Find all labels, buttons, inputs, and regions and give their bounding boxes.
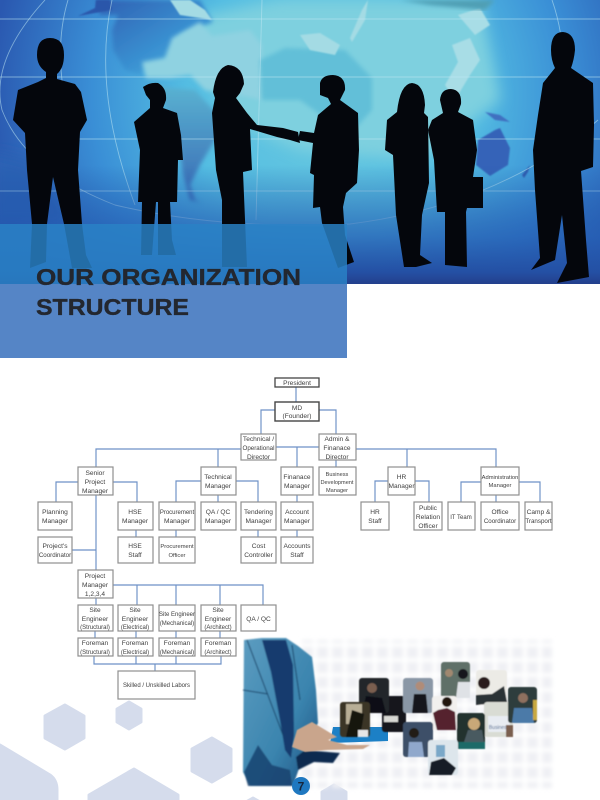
page number badge: 7 [298,780,305,794]
box: Technical Manager: Manager [205,483,232,490]
world map continents [0,0,530,224]
box: Finance Manager: Finanace [283,474,311,481]
photo tile [403,722,433,757]
box: Procurement Officer [159,537,195,563]
box: Public Relation Officer: Relation [416,514,440,521]
businessman [243,638,340,786]
box: Site Engineer Structural: Site [89,607,101,614]
box: Site Engineer Architect: (Architect) [204,625,232,631]
page number badge [292,777,310,795]
box: Senior Project Manager: Senior [85,470,105,477]
box: Technical Manager [201,467,236,495]
box: Admin & Finance Director: Admin & [325,436,350,443]
box: Foreman Structural: (Structural) [80,650,110,656]
box: Project Manager 1,2,3,4: Project [85,573,105,580]
box: QA / QC [241,605,276,631]
box: Skilled / Unskilled Labors [118,671,195,699]
photo tile: Business [489,725,510,731]
box: HSE Manager: HSE [128,509,142,516]
box: Planning Manager [38,502,72,530]
box: HSE Staff: HSE [128,543,142,550]
box: Camp & Transport: Transport [525,518,552,525]
box: HR Staff [361,502,389,530]
box: Site Engineer Architect: Site [212,607,224,614]
box: Technical / Operational Director [241,434,276,461]
box: MD: MD [292,405,302,412]
box: Office Coordinator [481,502,519,530]
box: Site Engineer Mechanical: Site Engineer [159,612,195,618]
box: Admin & Finance Director: Finanace [323,445,351,452]
box: Procurement Manager: Manager [164,518,191,525]
photo tile [476,670,507,705]
box: Senior Project Manager: Manager [82,488,109,495]
box: HSE Staff [118,537,153,563]
box: Foreman Architect [201,638,236,656]
box: Site Engineer Architect [201,605,236,631]
box: Public Relation Officer: Public [419,505,438,512]
box: Procurement Officer: Officer [169,553,186,559]
box: Office Coordinator: Office [491,509,509,516]
box: HR Manager: HR [397,474,406,481]
box: Site Engineer Electrical: Engineer [122,616,149,623]
box: Site Engineer Electrical: (Electrical) [121,625,149,631]
box: Project's Coordinator [38,537,72,563]
silhouettes of business people [13,32,594,283]
box: Technical / Operational Director: Operational [242,445,274,452]
pale grid backdrop [300,640,552,788]
box: Foreman Mechanical: (Mechanical) [160,650,194,656]
photo tile [403,678,433,713]
box: Foreman Architect: Foreman [205,640,232,647]
photo tile [441,662,470,698]
box: Site Engineer Electrical: Site [129,607,141,614]
box: Foreman Structural [78,638,113,656]
box: IT Team [448,502,475,530]
box: HSE Manager: Manager [122,518,149,525]
box: Project Manager 1,2,3,4: Manager [82,582,109,589]
box: Finance Manager: Manager [284,483,311,490]
box: Project's Coordinator: Coordinator [39,552,71,559]
box: Account Manager [281,502,313,530]
box: President [275,378,319,387]
box: Foreman Mechanical [159,638,195,656]
box: Accounts Staff [281,537,313,563]
photo tile [428,740,458,775]
box: Tendering Manager [241,502,276,530]
box: Project Manager 1,2,3,4 [78,570,113,598]
box: Administration Manager: Manager [489,483,512,489]
globe grid lines [0,0,600,225]
box: Senior Project Manager: Project [85,479,105,486]
box: Business Development Manager: Development [321,480,354,486]
box: Tendering Manager: Manager [245,518,272,525]
box: Account Manager: Manager [284,518,311,525]
box: IT Team: IT Team [450,515,472,521]
photo tile [359,678,389,713]
box: HR Staff: Staff [368,518,382,525]
title panel [0,224,347,358]
box: Admin & Finance Director [319,434,356,461]
box: QA / QC: QA / QC [246,616,271,623]
box: Foreman Mechanical: Foreman [164,640,191,647]
connector lines [56,387,540,671]
box: Planning Manager: Planning [42,509,68,516]
photo tile [340,702,370,737]
box: Procurement Manager [159,502,195,530]
box: Site Engineer Mechanical: (Mechanical) [160,621,194,627]
box: MD: (Founder) [283,413,311,420]
box: Senior Project Manager [78,467,113,495]
box: Admin & Finance Director: Director [325,454,349,461]
box: Business Development Manager: Business [326,472,349,478]
box: Camp & Transport [525,502,552,530]
box: Foreman Electrical: Foreman [122,640,149,647]
organization chart [38,378,552,699]
box: Foreman Electrical: (Electrical) [121,650,149,656]
box: President: President [283,380,311,387]
photo tile [484,702,513,737]
illustration: businessman with tablet and team photos [243,638,552,788]
box: Site Engineer Mechanical [159,605,195,631]
box: Account Manager: Account [285,509,309,516]
box: Accounts Staff: Accounts [283,543,311,550]
title text: OUR ORGANIZATION [36,264,301,290]
box: Foreman Structural: Foreman [82,640,109,647]
title text: STRUCTURE [36,294,189,320]
tablet [330,727,388,743]
box: Project Manager 1,2,3,4: 1,2,3,4 [85,591,105,598]
box: Office Coordinator: Coordinator [484,518,516,525]
box: HR Staff: HR [370,509,380,516]
box: Skilled / Unskilled Labors: Skilled / Unskilled Labors [123,683,190,689]
box: Planning Manager: Manager [42,518,69,525]
box: Finance Manager [281,467,313,495]
box: Technical Manager: Technical [204,474,232,481]
box: QA / QC Manager: Manager [205,518,232,525]
box: Administration Manager [481,467,519,495]
box: Technical / Operational Director: Technical / [243,436,274,443]
hero photo: globe background with silhouettes [0,0,600,284]
box: Cost Controller: Cost [252,543,265,550]
box: Business Development Manager: Manager [326,488,348,494]
box: QA / QC Manager: QA / QC [206,509,231,516]
box: Site Engineer Architect: Engineer [205,616,232,623]
box: HSE Staff: Staff [128,552,142,559]
box: Procurement Officer: Procurement [160,544,194,550]
photo tile [508,687,537,723]
box: HR Manager [388,467,415,495]
photo tile [457,713,485,749]
box: Administration Manager: Administration [482,475,518,481]
box: Site Engineer Structural [78,605,113,631]
box: QA / QC Manager [201,502,236,530]
box: Site Engineer Structural: Engineer [82,616,109,623]
box: Public Relation Officer: Officer [418,523,438,530]
box: Site Engineer Electrical [118,605,153,631]
box: Cost Controller: Controller [244,552,274,559]
box: Business Development Manager [319,467,356,495]
box: Project's Coordinator: Project's [42,543,68,550]
box: HSE Manager [118,502,153,530]
box: Cost Controller [241,537,276,563]
box: Accounts Staff: Staff [290,552,304,559]
box: Site Engineer Structural: (Structural) [80,625,110,631]
hand [292,722,370,752]
photo tile [382,696,406,732]
box: Procurement Manager: Procurement [160,510,195,516]
box: Public Relation Officer [414,502,442,530]
box: Technical / Operational Director: Director [247,454,271,461]
box: Foreman Architect: (Architect) [204,650,232,656]
box: Camp & Transport: Camp & [527,509,551,516]
photo tile [432,696,457,730]
box: MD [275,402,319,421]
box: Tendering Manager: Tendering [244,509,273,516]
decorative hexagons [0,702,346,800]
title text [36,264,301,320]
team photo tiles [340,662,537,775]
box: Foreman Electrical [118,638,153,656]
box: HR Manager: Manager [388,483,415,490]
